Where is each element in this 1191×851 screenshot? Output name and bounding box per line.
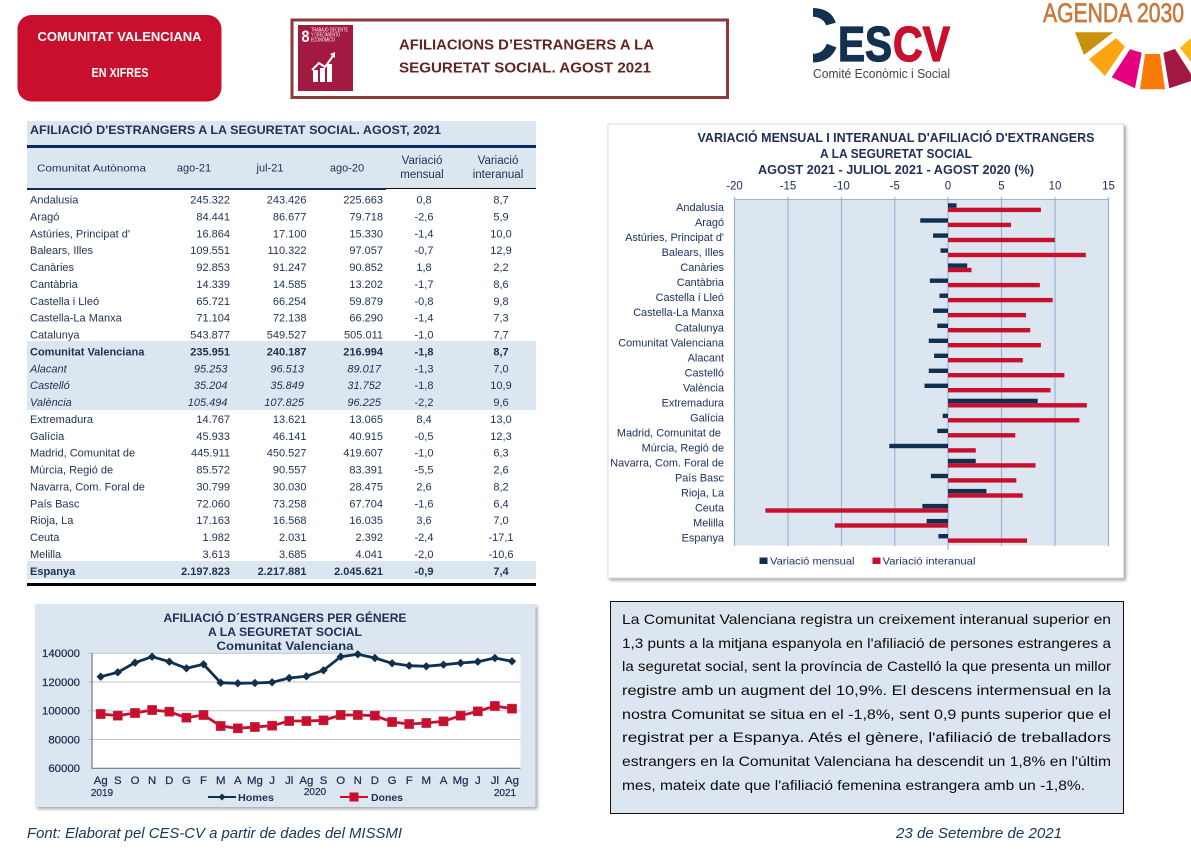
table rows: 96.225 <box>347 397 382 409</box>
table rows: Madrid, Comunitat de <box>30 448 135 460</box>
table rows: Aragó <box>30 211 59 223</box>
table rows: -1,8 <box>415 380 433 392</box>
x axis labels: G <box>388 775 397 787</box>
table title <box>27 121 536 145</box>
table rows: 8,4 <box>416 414 432 426</box>
table rows: 66.290 <box>349 313 383 325</box>
logo: CESCV: CV <box>893 18 950 72</box>
line chart legend: Homes <box>238 792 274 804</box>
category labels: Extremadura <box>662 397 725 409</box>
category labels: Catalunya <box>675 322 725 334</box>
table rows: 67.704 <box>349 498 383 510</box>
y axis labels: 60000 <box>48 763 80 775</box>
text box: commentary: la seguretat social, sent la província de Castelló la que presenta un millor <box>622 658 1111 674</box>
table rows: 13.621 <box>273 414 306 426</box>
table rows: 3.613 <box>202 549 230 561</box>
text box: commentary: mes, mateix date que l'afiliació femenina estrangera amb un -1,8%. <box>622 777 1085 793</box>
title box <box>292 20 728 98</box>
table rows: 72.138 <box>273 313 306 325</box>
table rows: 13.065 <box>349 414 383 426</box>
table rows: Alacant <box>29 363 68 375</box>
table rows: 7,4 <box>493 566 510 578</box>
table rows: 30.799 <box>196 481 230 493</box>
icon: SDG 8 decent work and economic growth: TRABAJO DECENTE <box>311 28 349 34</box>
y axis labels: 120000 <box>42 677 80 689</box>
value axis labels: -15 <box>780 180 796 192</box>
category labels: Ceuta <box>695 503 725 515</box>
legend: Variació mensual <box>770 556 854 568</box>
table rows: 109.551 <box>190 245 230 257</box>
table rows: 8,2 <box>493 481 509 493</box>
table rows: Extremadura <box>30 414 94 426</box>
badge: Comunitat Valenciana en xifres: EN XIFRES <box>92 65 149 80</box>
table rows: 2,6 <box>416 481 432 493</box>
icon: SDG 8 decent work and economic growth: ECONÓMICO <box>311 36 335 44</box>
category labels: Espanya <box>682 533 725 545</box>
table rows: -2,4 <box>415 532 433 544</box>
table rows: 28.475 <box>349 481 383 493</box>
table rows: 46.141 <box>273 431 306 443</box>
value axis labels: 15 <box>1102 180 1115 192</box>
value axis labels: -5 <box>890 180 900 192</box>
table rows: -1,8 <box>415 346 433 358</box>
category labels: Rioja, La <box>681 488 725 500</box>
x axis labels: N <box>354 775 362 787</box>
table rows: 14.767 <box>196 414 230 426</box>
table rows: 419.607 <box>343 448 383 460</box>
table title: AFILIACIÓ D'ESTRANGERS A LA SEGURETAT SOCIAL. AGOST, 2021 <box>30 124 442 137</box>
table rows: 245.322 <box>190 194 230 206</box>
table rows: 90.557 <box>273 464 306 476</box>
table rows: -1,7 <box>415 279 433 291</box>
category labels: Castella-La Manxa <box>633 307 725 319</box>
x axis labels: N <box>148 775 156 787</box>
value axis labels: 5 <box>998 180 1005 192</box>
table rows: 5,9 <box>493 211 509 223</box>
table rows: 549.527 <box>267 330 306 342</box>
x axis labels: S <box>320 775 328 787</box>
table rows: 110.322 <box>268 245 306 257</box>
table rows: 1,8 <box>416 262 432 274</box>
category labels: Comunitat Valenciana <box>618 337 725 349</box>
table rows <box>29 194 514 578</box>
text box: commentary: 1,3 punts a la mitjana espanyola en l'afiliació de persones estrangeres a <box>622 635 1111 651</box>
table rows: Canàries <box>30 262 75 274</box>
table rows: 40.915 <box>349 431 383 443</box>
table rows: Navarra, Com. Foral de <box>30 481 145 493</box>
text box: commentary: La Comunitat Valenciana registra un creixement interanual superior en <box>622 611 1111 627</box>
table rows: 240.187 <box>267 346 306 358</box>
x axis labels: Mg <box>247 775 263 787</box>
table rows: -10,6 <box>488 549 514 561</box>
x axis labels: M <box>216 775 225 787</box>
category labels: Balears, Illes <box>662 247 725 259</box>
x axis labels: J <box>475 775 481 787</box>
table rows: -2,2 <box>415 397 433 409</box>
line chart legend: Dones <box>371 792 403 804</box>
table header: jul-21 <box>256 162 283 174</box>
table rows: 9,6 <box>493 397 509 409</box>
highlight bands <box>27 341 536 586</box>
x axis labels: M <box>422 775 431 787</box>
table rows: 7,7 <box>493 330 509 342</box>
x axis labels <box>91 775 519 799</box>
table rows: 3.685 <box>279 549 306 561</box>
table header <box>27 145 536 190</box>
category labels: Canàries <box>680 262 725 274</box>
category labels: Andalusia <box>676 202 725 214</box>
bar chart title: VARIACIÓ MENSUAL I INTERANUAL D'AFILIACIÓ D'EXTRANGERS <box>698 130 1094 145</box>
table rows: Cantàbria <box>30 279 79 291</box>
table rows: Catalunya <box>30 330 80 342</box>
table rows: Galícia <box>30 431 65 443</box>
table rows: -2,6 <box>415 211 433 223</box>
table rows: 2.217.881 <box>258 566 306 578</box>
table rows: 8,7 <box>493 346 509 358</box>
table rows: 84.441 <box>196 211 230 223</box>
table rows: Múrcia, Regió de <box>30 464 113 476</box>
value axis labels: 10 <box>1049 180 1061 192</box>
table rows: 14.585 <box>273 279 306 291</box>
table rows: 16.568 <box>273 515 306 527</box>
table rows: 71.104 <box>196 313 230 325</box>
table rows: 2,6 <box>493 464 509 476</box>
table rows: 2,2 <box>493 262 509 274</box>
table rows: 105.494 <box>188 397 228 409</box>
table rows: València <box>30 397 72 409</box>
table rows: -1,3 <box>415 363 433 375</box>
table rows: -17,1 <box>488 532 514 544</box>
logo: CESCV: Comité Econòmic i Social <box>813 67 950 81</box>
table rows: 91.247 <box>273 262 306 274</box>
table rows: -0,8 <box>415 296 433 308</box>
table rows: 15.330 <box>349 228 383 240</box>
x axis labels: 2019 <box>91 788 114 799</box>
category labels: Castella i Lleó <box>656 292 724 304</box>
table rows: -2,0 <box>415 549 433 561</box>
table rows: 17.163 <box>196 515 230 527</box>
table header: ago-20 <box>330 162 364 174</box>
table rows: 13,0 <box>490 414 512 426</box>
y axis labels <box>42 648 80 775</box>
category labels: Múrcia, Regió de <box>642 442 724 454</box>
table rows: 35.849 <box>270 380 304 392</box>
text box: commentary <box>610 602 1124 814</box>
logo: CESCV: ES <box>838 18 892 72</box>
table rows: 2.031 <box>279 532 306 544</box>
table rows: 12,9 <box>490 245 512 257</box>
table rows: Balears, Illes <box>30 245 93 257</box>
x axis labels: O <box>336 775 345 787</box>
line chart panel: afiliació per gènere <box>35 604 536 807</box>
table rows: Melilla <box>30 549 62 561</box>
x axis labels: F <box>200 775 207 787</box>
x axis labels: A <box>440 775 448 787</box>
table rows: 450.527 <box>267 448 306 460</box>
table header: ago-21 <box>177 162 211 174</box>
table rows: 86.677 <box>273 211 306 223</box>
table rows: 16.864 <box>196 228 230 240</box>
table rows: 8,7 <box>493 194 509 206</box>
x axis labels: Jl <box>491 775 499 787</box>
table rows: 10,9 <box>490 380 512 392</box>
table rows: 13.202 <box>349 279 383 291</box>
table rows: 72.060 <box>196 498 230 510</box>
category labels: Galícia <box>690 412 725 424</box>
table rows: Astúries, Principat d' <box>30 228 130 240</box>
table rows: 89.017 <box>347 363 382 375</box>
bar chart title: A LA SEGURETAT SOCIAL <box>820 147 972 161</box>
title box: AFILIACIONS D’ESTRANGERS A LA <box>399 38 655 54</box>
table rows: País Basc <box>30 498 80 510</box>
x axis labels: O <box>131 775 140 787</box>
category labels: Astúries, Principat d' <box>625 232 724 244</box>
table rows: 445.911 <box>191 448 230 460</box>
x axis labels: F <box>406 775 413 787</box>
line chart title: Comunitat Valenciana <box>216 641 354 653</box>
table rows: 2.197.823 <box>181 566 230 578</box>
bar chart panel: variació mensual i interanual <box>608 124 1124 578</box>
table rows: 16.035 <box>349 515 383 527</box>
table header: mensual <box>400 169 444 181</box>
x axis labels: 2021 <box>494 788 517 799</box>
x axis labels: Ag <box>299 775 313 787</box>
table rows: -0,5 <box>415 431 433 443</box>
table rows: -1,6 <box>415 498 433 510</box>
y axis labels: 140000 <box>42 648 80 660</box>
table rows: 95.253 <box>194 363 228 375</box>
x axis labels: Jl <box>285 775 293 787</box>
table rows: Espanya <box>30 566 76 578</box>
table rows: 0,8 <box>416 194 432 206</box>
table rows: 4.041 <box>355 549 383 561</box>
table: afiliació d'estrangers per comunitat <box>27 121 536 586</box>
plot area and grid <box>88 653 520 768</box>
table rows: 66.254 <box>273 296 306 308</box>
table rows: 243.426 <box>267 194 306 206</box>
table rows: -0,7 <box>415 245 433 257</box>
table rows: Comunitat Valenciana <box>30 346 145 358</box>
table rows: 90.852 <box>349 262 383 274</box>
table rows: 96.513 <box>270 363 305 375</box>
table rows: 14.339 <box>196 279 230 291</box>
table rows: 543.877 <box>190 330 230 342</box>
table rows: 97.057 <box>349 245 383 257</box>
line: homes <box>101 654 512 683</box>
category labels: València <box>683 382 725 394</box>
table rows: -1,4 <box>415 313 433 325</box>
bar chart title <box>698 130 1094 177</box>
table rows: 2.392 <box>355 532 383 544</box>
category labels: Melilla <box>693 518 725 530</box>
value axis labels <box>726 180 1115 192</box>
legend <box>760 556 976 568</box>
table rows: -1,0 <box>415 330 433 342</box>
value axis labels: -10 <box>833 180 850 192</box>
table rows: Andalusia <box>30 194 79 206</box>
y axis labels: 100000 <box>42 706 80 718</box>
table rows: 17.100 <box>273 228 306 240</box>
table rows: 7,0 <box>493 363 509 375</box>
table rows: 8,6 <box>493 279 509 291</box>
table rows: 6,4 <box>493 498 509 510</box>
table header: Variació <box>478 155 518 167</box>
table rows: 6,3 <box>493 448 509 460</box>
line: dones <box>101 706 512 728</box>
category labels: Navarra, Com. Foral de <box>610 458 724 470</box>
line chart legend <box>208 792 403 804</box>
date note: 23 de Setembre de 2021 <box>895 825 1062 842</box>
table rows: 85.572 <box>196 464 230 476</box>
text box: commentary: estrangers en la Comunitat Valenciana ha descendit un 1,8% en l'últim <box>622 753 1111 769</box>
icon: SDG 8 decent work and economic growth: Y CRECIMIENTO <box>311 32 340 38</box>
line chart title: A LA SEGURETAT SOCIAL <box>208 627 362 639</box>
x axis labels: G <box>182 775 191 787</box>
table rows: 3,6 <box>416 515 432 527</box>
table header: interanual <box>473 169 523 181</box>
table rows: Castelló <box>30 380 70 392</box>
table rows: 31.752 <box>347 380 381 392</box>
x axis labels: J <box>269 775 275 787</box>
icon: SDG 8 decent work and economic growth: 8 <box>302 27 310 46</box>
category labels: Castelló <box>685 367 724 379</box>
table rows: Ceuta <box>30 532 60 544</box>
x axis labels: D <box>165 775 173 787</box>
logo: Agenda 2030 <box>1043 0 1191 89</box>
source note: Font: Elaborat pel CES-CV a partir de dades del MISSMI <box>27 825 402 842</box>
text box: commentary: registrat per a Espanya. Atés el gènere, l'afiliació de treballadors <box>622 729 1111 745</box>
table rows: -1,0 <box>415 448 433 460</box>
icon: SDG 8 decent work and economic growth <box>298 25 353 91</box>
category labels: Aragó <box>695 217 724 229</box>
x axis labels: Ag <box>505 775 519 787</box>
x axis labels: Ag <box>94 775 108 787</box>
table rows: 9,8 <box>493 296 509 308</box>
x axis labels: D <box>371 775 379 787</box>
category labels: Alacant <box>688 352 724 364</box>
table rows: 92.853 <box>196 262 230 274</box>
bars: variació interanual <box>765 208 1087 543</box>
table rows: 65.721 <box>196 296 230 308</box>
logo: CESCV <box>813 8 950 78</box>
table header: Variació <box>402 155 442 167</box>
table rows: Castella i Lleó <box>30 296 99 308</box>
table rows: 30.030 <box>273 481 306 493</box>
category labels <box>610 202 725 545</box>
table rows: Castella-La Manxa <box>30 313 123 325</box>
category labels: País Basc <box>675 472 725 484</box>
table rows: 216.994 <box>343 346 384 358</box>
text box: commentary: nostra Comunitat se situa en el -1,8%, sent 0,9 punts superior que el <box>622 706 1111 722</box>
table rows: 59.879 <box>349 296 383 308</box>
table rows: 45.933 <box>196 431 230 443</box>
bars: variació mensual <box>889 203 1038 538</box>
badge: Comunitat Valenciana en xifres: COMUNITAT VALENCIANA <box>38 29 202 44</box>
table rows: 1.982 <box>202 532 230 544</box>
x axis labels: A <box>234 775 242 787</box>
table rows: 10,0 <box>490 228 512 240</box>
table rows: 107.825 <box>264 397 305 409</box>
badge: Comunitat Valenciana en xifres <box>18 15 222 102</box>
table rows: 505.011 <box>344 330 383 342</box>
title box: SEGURETAT SOCIAL. AGOST 2021 <box>399 60 651 76</box>
value axis labels: 0 <box>945 180 951 192</box>
table rows: 79.718 <box>349 211 383 223</box>
legend: Variació interanual <box>882 556 976 568</box>
x axis labels: S <box>114 775 122 787</box>
value axis labels: -20 <box>726 180 743 192</box>
table rows: 7,3 <box>493 313 509 325</box>
table rows: 225.663 <box>343 194 383 206</box>
table rows: -1,4 <box>415 228 433 240</box>
table rows: -5,5 <box>415 464 433 476</box>
table header: Comunitat Autònoma <box>37 162 146 174</box>
line chart title <box>164 612 407 653</box>
category labels: Madrid, Comunitat de <box>617 427 721 439</box>
table rows: 73.258 <box>273 498 306 510</box>
table rows: 7,0 <box>493 515 509 527</box>
category labels: Cantàbria <box>677 277 725 289</box>
x axis labels: 2020 <box>304 787 327 798</box>
plot area <box>734 197 1108 550</box>
table rows: 35.204 <box>194 380 228 392</box>
text box: commentary: registre amb un augment del 10,9%. El descens intermensual en la <box>622 682 1111 698</box>
table rows: Rioja, La <box>30 515 74 527</box>
table rows: -0,9 <box>415 566 433 578</box>
bar chart title: AGOST 2021 - JULIOL 2021 - AGOST 2020 (%) <box>758 163 1034 177</box>
table rows: 235.951 <box>190 346 230 358</box>
table rows: 12,3 <box>490 431 512 443</box>
y axis labels: 80000 <box>48 734 80 746</box>
line chart title: AFILIACIÓ D´ESTRANGERS PER GÉNERE <box>164 612 407 625</box>
table rows: 2.045.621 <box>334 566 383 578</box>
x axis labels: Mg <box>453 775 469 787</box>
table rows: 83.391 <box>349 464 383 476</box>
